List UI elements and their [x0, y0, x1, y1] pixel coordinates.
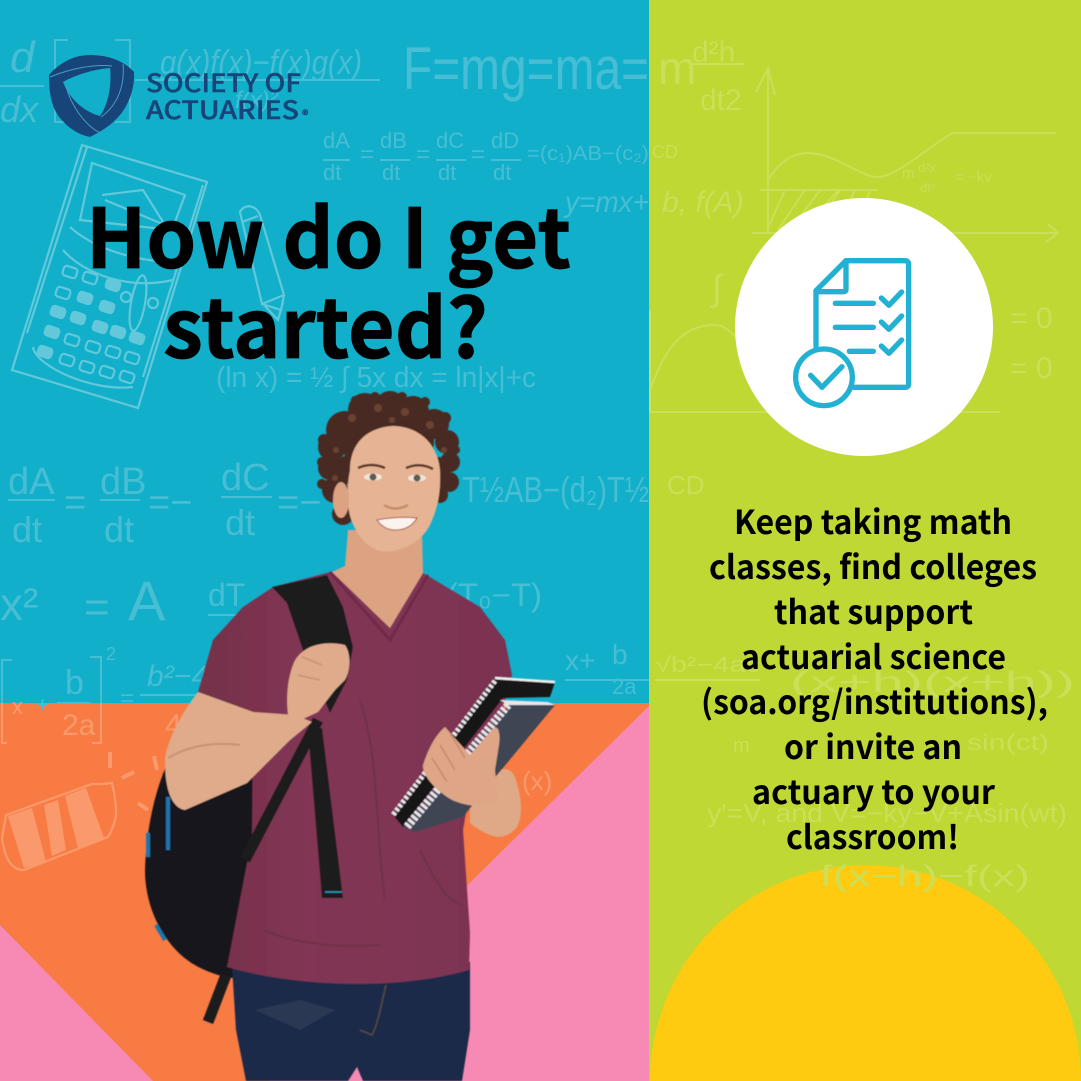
icon: pencil doodle	[240, 206, 284, 320]
icon: calculator doodle	[12, 145, 207, 408]
logo wordmark: ACTUARIES	[146, 91, 299, 127]
notebooks	[393, 678, 555, 832]
math doodles on teal: dt	[104, 509, 134, 550]
panel: lime right background	[649, 0, 1081, 1081]
math doodles on teal: dB	[100, 461, 146, 503]
math doodles on teal: +	[36, 692, 49, 717]
math doodles on teal: (x)	[522, 766, 552, 796]
math doodles on teal: dC	[221, 457, 270, 499]
math doodles on teal: 2	[106, 644, 116, 664]
math doodles on teal: y=mx+	[563, 186, 649, 219]
math doodles on teal: 2a	[62, 709, 96, 742]
hand on notebook	[423, 727, 500, 806]
hair	[317, 391, 460, 525]
math doodles on lime: CD	[667, 470, 705, 500]
math doodles on lime: = 0	[1010, 352, 1053, 385]
icon: checklist document	[796, 261, 909, 406]
text block: advice	[701, 496, 1048, 859]
math doodles on lime	[652, 36, 1075, 893]
math doodles on teal: dA	[8, 461, 55, 503]
title	[86, 173, 571, 382]
math doodles on lime: f(x−h)−f(x)	[820, 860, 1030, 893]
math doodles on teal: dt	[438, 160, 456, 185]
math doodles on teal: 2a	[612, 674, 637, 699]
math doodles on teal: dt	[323, 160, 341, 185]
title: started?	[163, 263, 488, 382]
math doodles on teal: b²−4	[147, 660, 208, 693]
backpack	[145, 762, 255, 978]
math doodles on teal: F=mg=ma=	[403, 35, 649, 102]
neck	[332, 530, 423, 628]
math doodles on teal: x	[12, 694, 23, 719]
left arm	[165, 692, 312, 810]
face	[348, 426, 440, 552]
logo wordmark: SOCIETY OF	[146, 64, 301, 100]
yellow semicircle	[650, 865, 1081, 1081]
math doodles on teal: 4	[165, 709, 182, 742]
logo shield	[49, 55, 134, 137]
math doodles on lime: √b²−4ac	[655, 652, 760, 677]
text block: advice: classroom!	[786, 811, 959, 859]
math doodles on lime: d²x	[918, 160, 937, 175]
jeans	[232, 962, 470, 1081]
shoulder strap	[272, 575, 353, 713]
math doodles on teal: T½AB−(d₂)T½	[462, 469, 649, 510]
logo: Society of Actuaries	[49, 55, 308, 137]
text block: advice: actuary to your	[752, 766, 996, 814]
math doodles on teal: f(x)²	[235, 87, 279, 114]
hair highlights	[332, 404, 447, 481]
math doodles on lime: CD	[652, 142, 678, 162]
graph doodles on lime	[650, 64, 1058, 680]
doodle strokes on orange	[2, 703, 101, 743]
eyes and brows	[358, 465, 433, 482]
math doodles on teal: =	[360, 141, 374, 168]
logo wordmark	[146, 64, 308, 127]
title: How do I get	[86, 173, 571, 292]
icon panel: white circle with checklist	[735, 198, 993, 456]
math doodles on teal: dt	[493, 160, 511, 185]
math doodles on teal: =−	[148, 482, 192, 524]
math doodles on teal: dD	[491, 128, 519, 153]
math doodles on teal: dT	[208, 577, 245, 613]
hanging straps	[308, 728, 343, 898]
math doodles on teal: dt	[12, 509, 42, 550]
right arm	[470, 769, 521, 837]
math doodles on lime: m	[733, 735, 750, 757]
math doodles on teal: dC	[436, 128, 464, 153]
math doodles on teal: (T₀−T)	[447, 577, 542, 613]
math doodles on teal: x+	[565, 645, 595, 676]
math doodles on teal: =(c₁)AB−(c₂)	[527, 143, 649, 165]
math doodles on lime: dt²	[920, 180, 936, 195]
math doodles on lime: m	[658, 42, 696, 94]
math doodles on lime: = −kv	[955, 169, 992, 186]
smile	[377, 517, 417, 530]
panel: teal and orange left background	[0, 0, 649, 1081]
math doodles on teal: =	[416, 141, 430, 168]
nose	[384, 505, 408, 508]
math doodles on teal: dt	[382, 160, 400, 185]
doodle strokes on teal	[0, 40, 649, 703]
shirt	[198, 572, 512, 984]
math doodles on lime: m	[902, 165, 914, 182]
text block: advice: that support	[774, 586, 973, 634]
math doodles on teal: A	[128, 569, 166, 632]
math doodles on lime: = 0	[1010, 302, 1053, 335]
math doodles on lime: y′=V, and V=−ky−V+Asin(wt)	[707, 798, 1067, 828]
math doodles on teal	[0, 33, 649, 796]
math doodles on teal: dx	[0, 89, 40, 130]
math doodles on lime: b, f(A)	[662, 186, 744, 219]
math doodles on lime: d²h	[692, 36, 735, 69]
text block: advice: (soa.org/institutions),	[701, 676, 1048, 724]
math doodles on teal: =	[64, 482, 86, 524]
math doodles on teal: dt	[225, 502, 255, 543]
student with backpack and notebooks	[145, 391, 555, 1081]
math doodles on teal: d	[10, 33, 36, 82]
text block: advice: or invite an	[784, 721, 962, 769]
math doodles on lime: sin(ct)	[967, 730, 1049, 755]
math doodles on teal: (ln x) = ½ ∫ 5x dx = ln|x|+c	[216, 362, 536, 394]
math doodles on teal: g(x)f(x)−f(x)g(x)	[160, 44, 362, 82]
logo wordmark: ®	[302, 105, 308, 124]
math doodles on teal: b	[612, 639, 628, 670]
ear	[333, 482, 349, 518]
text block: advice: actuarial science	[741, 631, 1006, 679]
math doodles on lime: dt2	[700, 84, 742, 117]
math doodles on teal: =	[84, 583, 110, 632]
math doodles on teal: dB	[380, 128, 407, 153]
math doodles on lime: ∫	[710, 267, 724, 308]
shirt folds	[262, 700, 462, 946]
text block: advice: Keep taking math	[734, 496, 1012, 544]
icon: battery doodle	[2, 752, 157, 870]
math doodles on teal: dA	[323, 128, 350, 153]
math doodles on teal: =	[471, 141, 485, 168]
math doodles on lime: (x+h)(x+h))	[790, 666, 1075, 699]
math doodles on teal: x²	[0, 578, 38, 630]
math doodles on teal: =	[120, 685, 134, 712]
hand on strap	[287, 643, 350, 725]
text block: advice: classes, find colleges	[709, 541, 1037, 589]
math doodles on teal: =−	[277, 482, 321, 524]
math doodles on teal: b	[65, 664, 84, 702]
